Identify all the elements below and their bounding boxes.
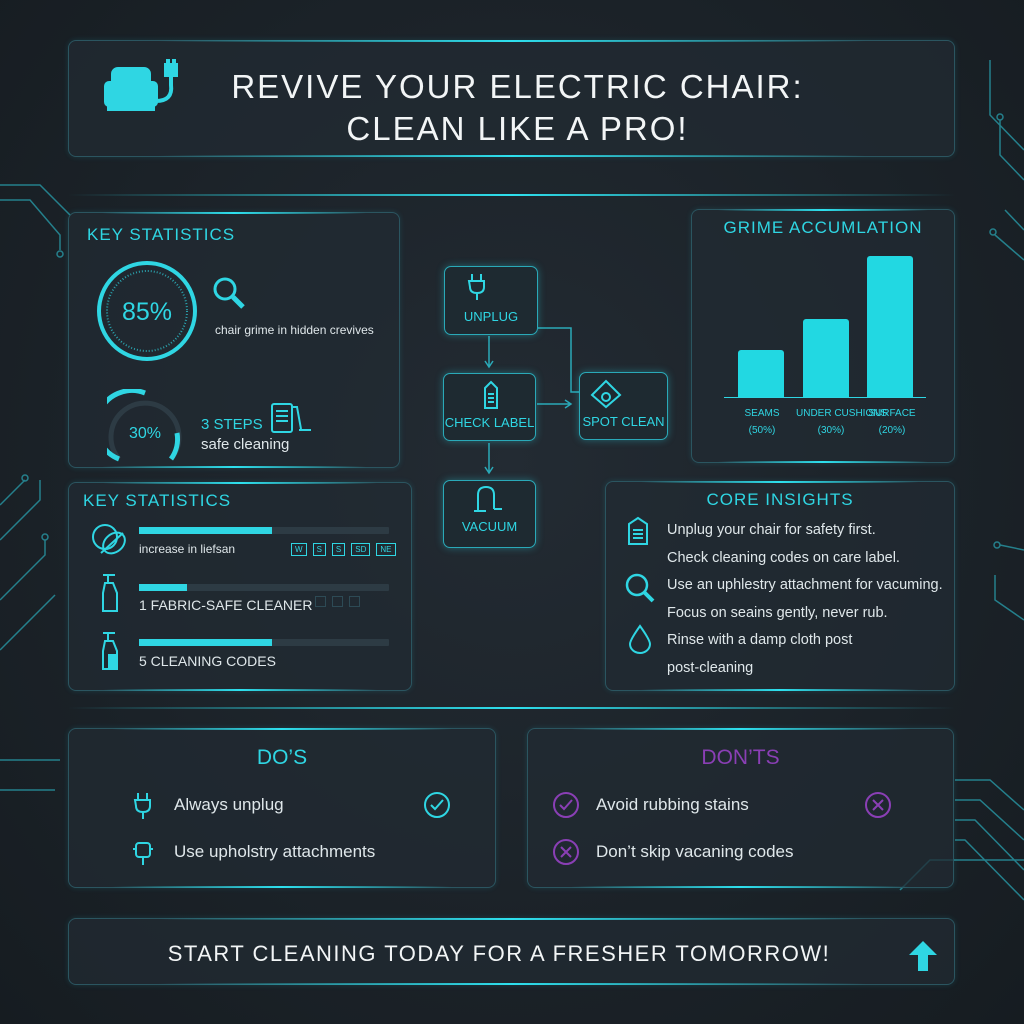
insights text: Rinse with a damp cloth post — [667, 632, 852, 648]
stat text 3 steps: safe cleaning — [201, 436, 289, 453]
panel: key statistics 2: NE — [380, 545, 392, 554]
icon: leaf — [92, 524, 126, 554]
heading: DON’TS — [701, 746, 780, 769]
icon: x circle — [865, 792, 891, 818]
step: unplug: UNPLUG — [464, 309, 518, 324]
bar chart: SURFACE — [868, 408, 916, 419]
panel: key statistics 2: S — [336, 545, 341, 554]
panel: don'ts — [527, 728, 954, 888]
panel: do's — [68, 728, 496, 888]
insights text: Focus on seains gently, never rub. — [667, 604, 888, 620]
heading: CORE INSIGHTS — [706, 490, 854, 509]
title text: CLEAN LIKE A PRO! — [346, 110, 689, 147]
panel: do's: Use upholstry attachments — [174, 842, 375, 861]
ring 30% — [107, 389, 182, 462]
insights text — [667, 522, 943, 676]
title panel — [68, 40, 955, 157]
icon: attachment — [133, 842, 153, 865]
step: vacuum: VACUUM — [462, 519, 517, 534]
bar chart: SEAMS — [744, 408, 780, 419]
icon: check purple — [553, 792, 579, 818]
panel: key statistics 2: W — [295, 545, 303, 554]
icon: drop — [629, 624, 651, 654]
icon: spray bottle 2 — [102, 632, 118, 670]
bar chart: (30%) — [818, 425, 844, 436]
step: unplug — [444, 266, 538, 335]
icon: x circle 2 — [553, 839, 579, 865]
icon: up arrow — [909, 941, 937, 971]
icon: magnifier — [626, 574, 654, 602]
panel: key statistics 1 — [68, 212, 400, 468]
step: spot clean — [579, 372, 668, 440]
bar chart — [724, 256, 926, 436]
flowchart — [439, 262, 672, 552]
heading: GRIME ACCUMLATION — [724, 218, 922, 237]
stat text 3 steps — [201, 416, 289, 453]
bar chart: (50%) — [749, 425, 775, 436]
icon: check circle — [424, 792, 450, 818]
icon: electric chair — [104, 59, 178, 111]
ring 85% — [97, 261, 197, 361]
heading: DO’S — [257, 746, 307, 769]
call to action banner — [68, 918, 955, 985]
ring 85%: 85% — [122, 298, 172, 326]
insights text: post-cleaning — [667, 660, 753, 676]
bar chart: (20%) — [879, 425, 905, 436]
panel: don'ts: Don’t skip vacaning codes — [596, 842, 794, 861]
icon: magnifier — [214, 278, 245, 309]
heading: KEY STATISTICS — [83, 491, 231, 510]
arrows — [484, 327, 579, 474]
stat row 1 — [139, 527, 389, 534]
panel: do's: Always unplug — [174, 795, 284, 814]
insights text: Unplug your chair for safety first. — [667, 522, 876, 538]
step: vacuum — [443, 480, 536, 548]
icon: label — [628, 516, 648, 545]
panel: don'ts: Avoid rubbing stains — [596, 795, 749, 814]
panel: key statistics 2 — [68, 482, 412, 691]
step: check label: CHECK LABEL — [445, 415, 534, 430]
panel: key statistics 2: increase in liefsan — [139, 542, 235, 556]
step: check label — [443, 373, 536, 441]
panel: core insights — [605, 481, 955, 691]
insights text: Check cleaning codes on care label. — [667, 550, 900, 566]
icon: document — [271, 403, 311, 433]
panel: key statistics 2: S — [317, 545, 322, 554]
icon: spray bottle — [102, 574, 118, 612]
panel: grime accumulation chart — [691, 209, 955, 463]
step: spot clean: SPOT CLEAN — [582, 414, 665, 429]
panel: key statistics 2: 1 FABRIC-SAFE CLEANER — [139, 597, 312, 613]
call to action banner: START CLEANING TODAY FOR A FRESHER TOMORROW! — [168, 941, 830, 966]
icon: plug — [134, 793, 151, 819]
panel: key statistics 2: 5 CLEANING CODES — [139, 653, 276, 669]
stat row 2 — [139, 584, 389, 591]
insights text: Use an uphlestry attachment for vacuming. — [667, 577, 943, 593]
heading: KEY STATISTICS — [87, 225, 235, 244]
stat row 3 — [139, 639, 389, 646]
title text: REVIVE YOUR ELECTRIC CHAIR: — [231, 68, 804, 105]
stat text 3 steps: 3 STEPS — [201, 416, 263, 433]
title text — [231, 68, 804, 147]
ring 30%: 30% — [129, 425, 161, 442]
bar chart: UNDER CUSHIONS — [796, 408, 887, 419]
panel: key statistics 2: SD — [355, 545, 366, 554]
stat text: chair grime in hidden crevives — [215, 323, 374, 337]
